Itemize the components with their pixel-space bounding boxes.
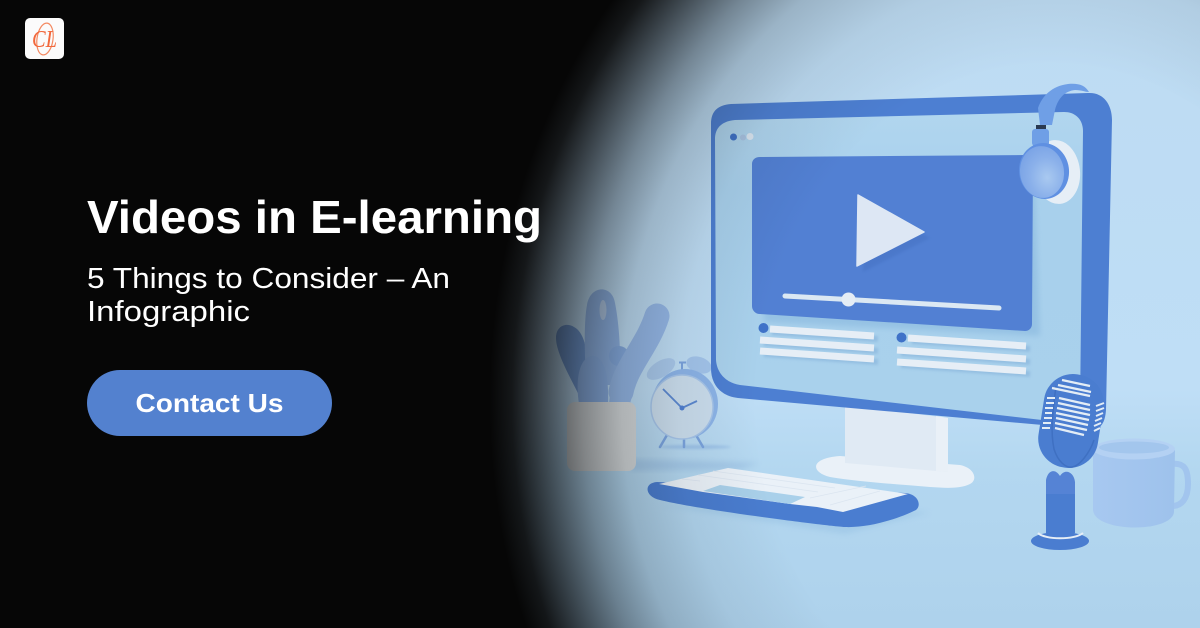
- video player panel: [752, 155, 1033, 331]
- icon: monitor stand: [816, 405, 974, 488]
- icon: keyboard: [648, 468, 930, 534]
- text lines: left block: [758, 323, 874, 359]
- icon: microphone: [1031, 370, 1108, 550]
- icon: alarm clock: [643, 353, 731, 449]
- icon: mug: [1093, 438, 1188, 528]
- logo badge: [25, 18, 64, 59]
- subtitle: 5 Things to Consider – An: [87, 263, 450, 295]
- progress slider: [785, 292, 999, 308]
- title: Videos in E-learning: [87, 191, 542, 243]
- button: Contact Us: Contact Us: [136, 388, 284, 418]
- button: Contact Us: [87, 370, 332, 436]
- icon: monitor: [711, 93, 1112, 429]
- subtitle: Infographic: [87, 296, 250, 328]
- illustration: desk scene: [556, 84, 1188, 550]
- logo badge: CL: [32, 27, 57, 53]
- icon: headphones: [1015, 84, 1089, 206]
- window dots: [730, 133, 754, 140]
- text lines: right block: [896, 332, 1026, 371]
- icon: play button: [857, 195, 924, 266]
- icon: cactus in pot: [556, 289, 760, 471]
- subtitle: [87, 263, 450, 328]
